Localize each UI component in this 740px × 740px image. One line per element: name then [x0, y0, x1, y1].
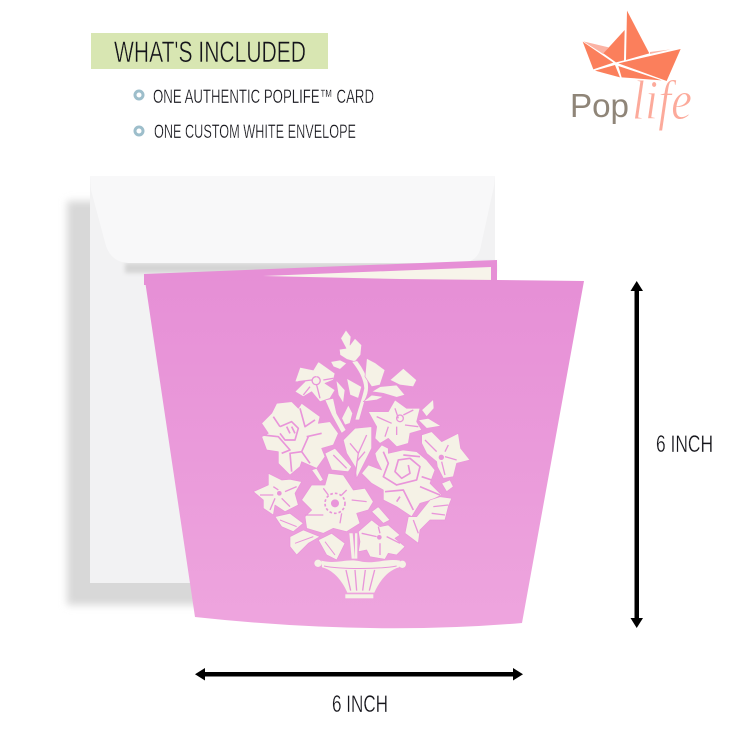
- bullet item: envelope: ONE CUSTOM WHITE ENVELOPE: [154, 121, 356, 143]
- arrow: height dimension: [630, 281, 643, 628]
- flower: upper right: [368, 399, 441, 447]
- card front: [144, 274, 584, 628]
- flower: lower center: [358, 507, 405, 559]
- envelope: [67, 176, 495, 605]
- flower: top left: [295, 362, 335, 402]
- flower: left small: [253, 473, 302, 515]
- list: included items: [135, 86, 374, 143]
- logo wordmark: Pop: [570, 87, 629, 124]
- rose: center right: [362, 445, 442, 517]
- top bud: [331, 330, 362, 369]
- logo: poplife: [570, 11, 692, 132]
- flower: center large: [302, 473, 373, 533]
- rose: left: [262, 402, 338, 475]
- vase: [314, 533, 406, 598]
- icon: origami boat: [583, 11, 681, 81]
- logo: poplife: life: [632, 70, 692, 132]
- heading: what's included: WHAT'S INCLUDED: [114, 36, 306, 69]
- stem and top leaves: [325, 358, 417, 433]
- bullet item: envelope: [135, 121, 356, 143]
- right bud and leaves: [405, 497, 452, 543]
- floral bouquet cutout: [253, 330, 470, 598]
- bullet item: card: [135, 86, 374, 108]
- flower: right: [422, 432, 470, 492]
- arrow: width dimension: [195, 668, 523, 680]
- flap shadow: [125, 263, 495, 273]
- heading: what's included: [91, 33, 328, 69]
- envelope body: [90, 176, 495, 583]
- card back panel: [144, 260, 497, 285]
- envelope flap: [90, 176, 495, 263]
- label: width 6 inch: 6 INCH: [332, 691, 388, 718]
- card inner: [263, 267, 491, 285]
- central leaves: [312, 427, 372, 482]
- bullet item: card: ONE AUTHENTIC POPLIFE™ CARD: [153, 86, 374, 108]
- envelope shadow: [67, 201, 467, 605]
- pop-up card: [144, 260, 584, 628]
- leaves: lower left: [275, 513, 345, 560]
- label: height 6 inch: 6 INCH: [656, 431, 713, 458]
